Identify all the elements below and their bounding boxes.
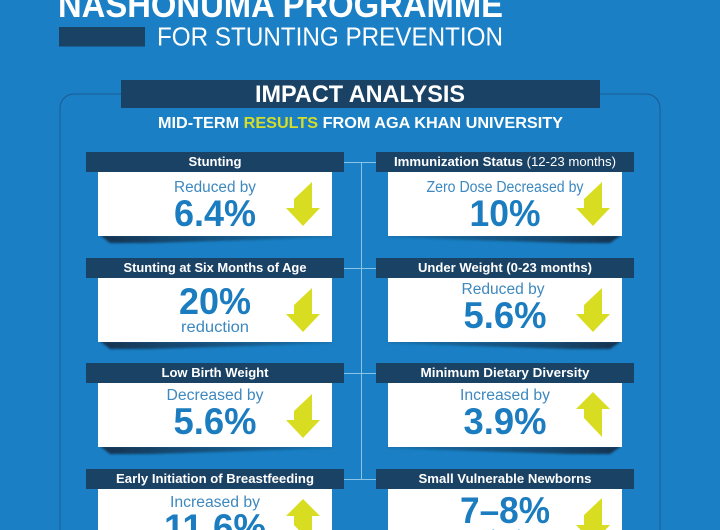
panel: small vulnerable newborns: 7–8%	[460, 490, 550, 530]
panel: minimum dietary diversity	[376, 363, 634, 454]
panel: impact analysis outline	[60, 94, 660, 530]
panel: stunting at six months of age: Stunting at Six Months of Age	[124, 261, 307, 275]
icon: down arrow	[576, 498, 610, 530]
panel: stunting: Reduced by	[174, 179, 256, 196]
panel: under weight	[376, 258, 634, 349]
panel: early initiation of breastfeeding: Early Initiation of Breastfeeding	[116, 472, 314, 486]
title	[58, 0, 503, 52]
subheading: MID-TERM RESULTS FROM AGA KHAN UNIVERSITY	[158, 115, 564, 132]
heading: impact analysis: IMPACT ANALYSIS	[255, 81, 465, 108]
panel: small vulnerable newborns	[376, 469, 634, 530]
panel: early initiation of breastfeeding: Increased by	[170, 494, 260, 511]
panel: under weight: Under Weight (0-23 months)	[418, 261, 592, 275]
icon: down arrow	[286, 288, 320, 332]
icon: down arrow	[576, 182, 610, 226]
panel: early initiation of breastfeeding	[86, 469, 344, 530]
panel: minimum dietary diversity: 3.9%	[464, 401, 546, 442]
panel: small vulnerable newborns: Small Vulnerable Newborns	[418, 472, 592, 486]
panel: low birth weight: Decreased by	[166, 387, 264, 404]
panel: stunting at six months of age	[86, 258, 344, 349]
panel: under weight: Reduced by	[462, 281, 545, 298]
panel: immunization status	[376, 152, 634, 243]
title accent bar	[59, 27, 145, 46]
panel: stunting	[86, 152, 344, 243]
icon: up arrow	[286, 499, 320, 530]
panel: under weight: 5.6%	[464, 295, 546, 336]
connector lines	[344, 162, 376, 480]
icon: down arrow	[576, 288, 610, 332]
icon: down arrow	[286, 182, 320, 226]
subtitle: FOR STUNTING PREVENTION	[157, 24, 503, 52]
panel: stunting at six months of age: 20%	[179, 281, 251, 322]
panel: low birth weight: Low Birth Weight	[162, 366, 269, 380]
panel: minimum dietary diversity: Increased by	[460, 387, 550, 404]
panel: stunting: Stunting	[188, 155, 242, 169]
icon: up arrow	[576, 392, 610, 437]
panel: minimum dietary diversity: Minimum Dietary Diversity	[420, 366, 590, 380]
panel: stunting at six months of age: reduction	[181, 319, 249, 336]
panel: immunization status: 10%	[470, 193, 540, 234]
panel: low birth weight: 5.6%	[174, 401, 256, 442]
panel: immunization status: Zero Dose Decreased by	[426, 179, 584, 196]
heading: impact analysis	[121, 80, 600, 108]
icon: down arrow	[286, 394, 320, 438]
panel: immunization status: Immunization Status (12-23 months)	[394, 155, 616, 169]
panel: low birth weight	[86, 363, 344, 454]
panel: stunting: 6.4%	[174, 193, 256, 234]
